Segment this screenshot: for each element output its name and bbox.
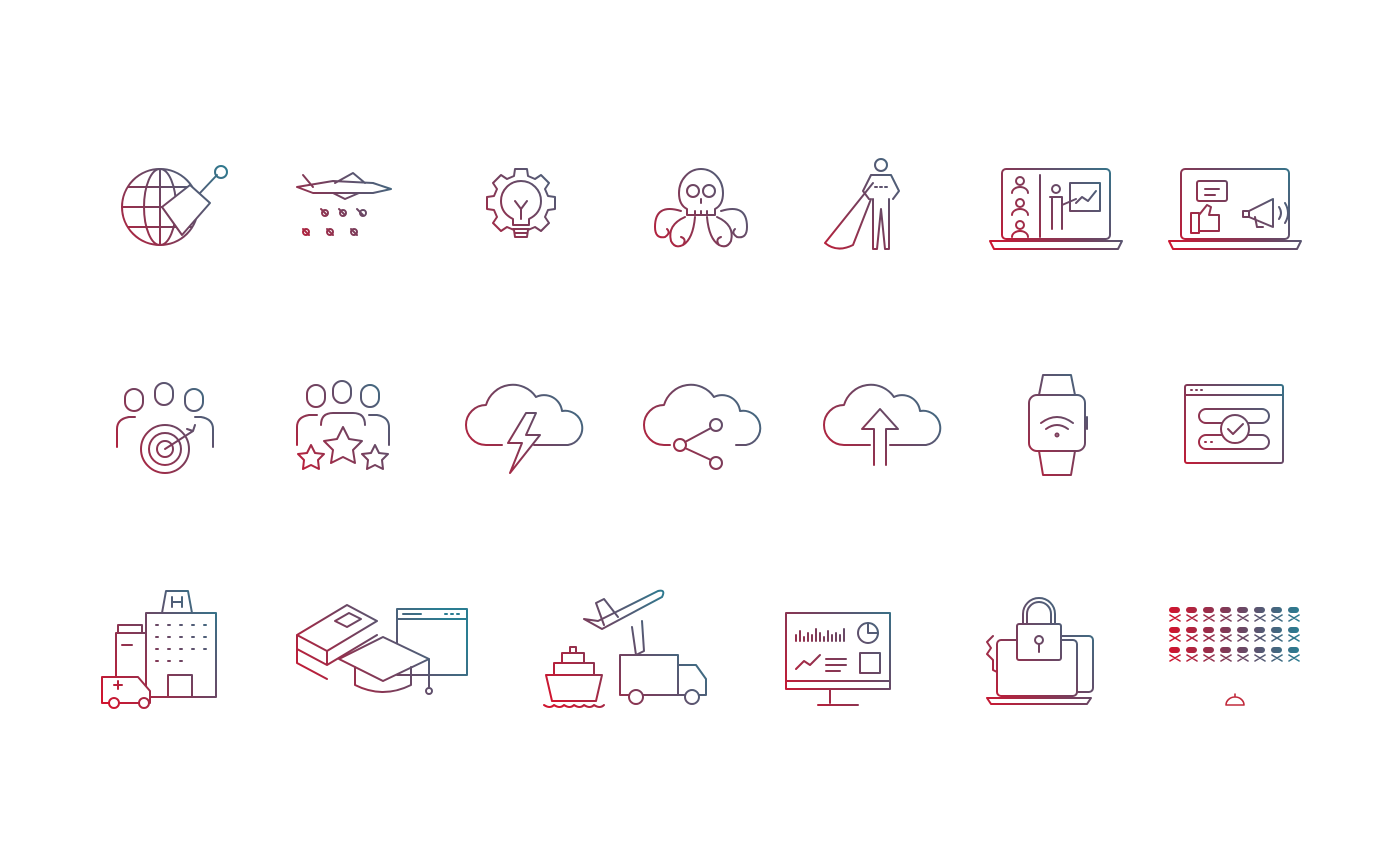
icon: browser with toggle check xyxy=(1184,384,1284,464)
icon: smartwatch wifi xyxy=(1028,374,1088,476)
icon: gear with light bulb xyxy=(486,168,556,238)
icon: globe with trowel xyxy=(121,165,228,246)
icon: team with target xyxy=(116,382,214,474)
icon: laptop video conference xyxy=(989,168,1123,250)
icon: monitor dashboard xyxy=(785,612,891,706)
icon: laptop with thumbs up and megaphone xyxy=(1168,168,1302,250)
icon: superhero with cape xyxy=(824,158,900,250)
icon: ship, plane and truck xyxy=(543,590,707,708)
icon: devices with padlock xyxy=(986,597,1094,705)
icon: jet dropping bombs xyxy=(296,172,392,236)
icon: books, graduation cap and browser xyxy=(296,604,468,695)
icon: team with stars xyxy=(296,380,390,470)
icon: skull and crossbones grid xyxy=(1169,607,1300,706)
icon: cloud upload xyxy=(823,384,942,466)
icon: octopus skull xyxy=(654,168,748,248)
icon: cloud with lightning xyxy=(465,384,584,474)
icon: cloud with share xyxy=(643,384,762,470)
icon: hospital with ambulance xyxy=(101,590,217,709)
